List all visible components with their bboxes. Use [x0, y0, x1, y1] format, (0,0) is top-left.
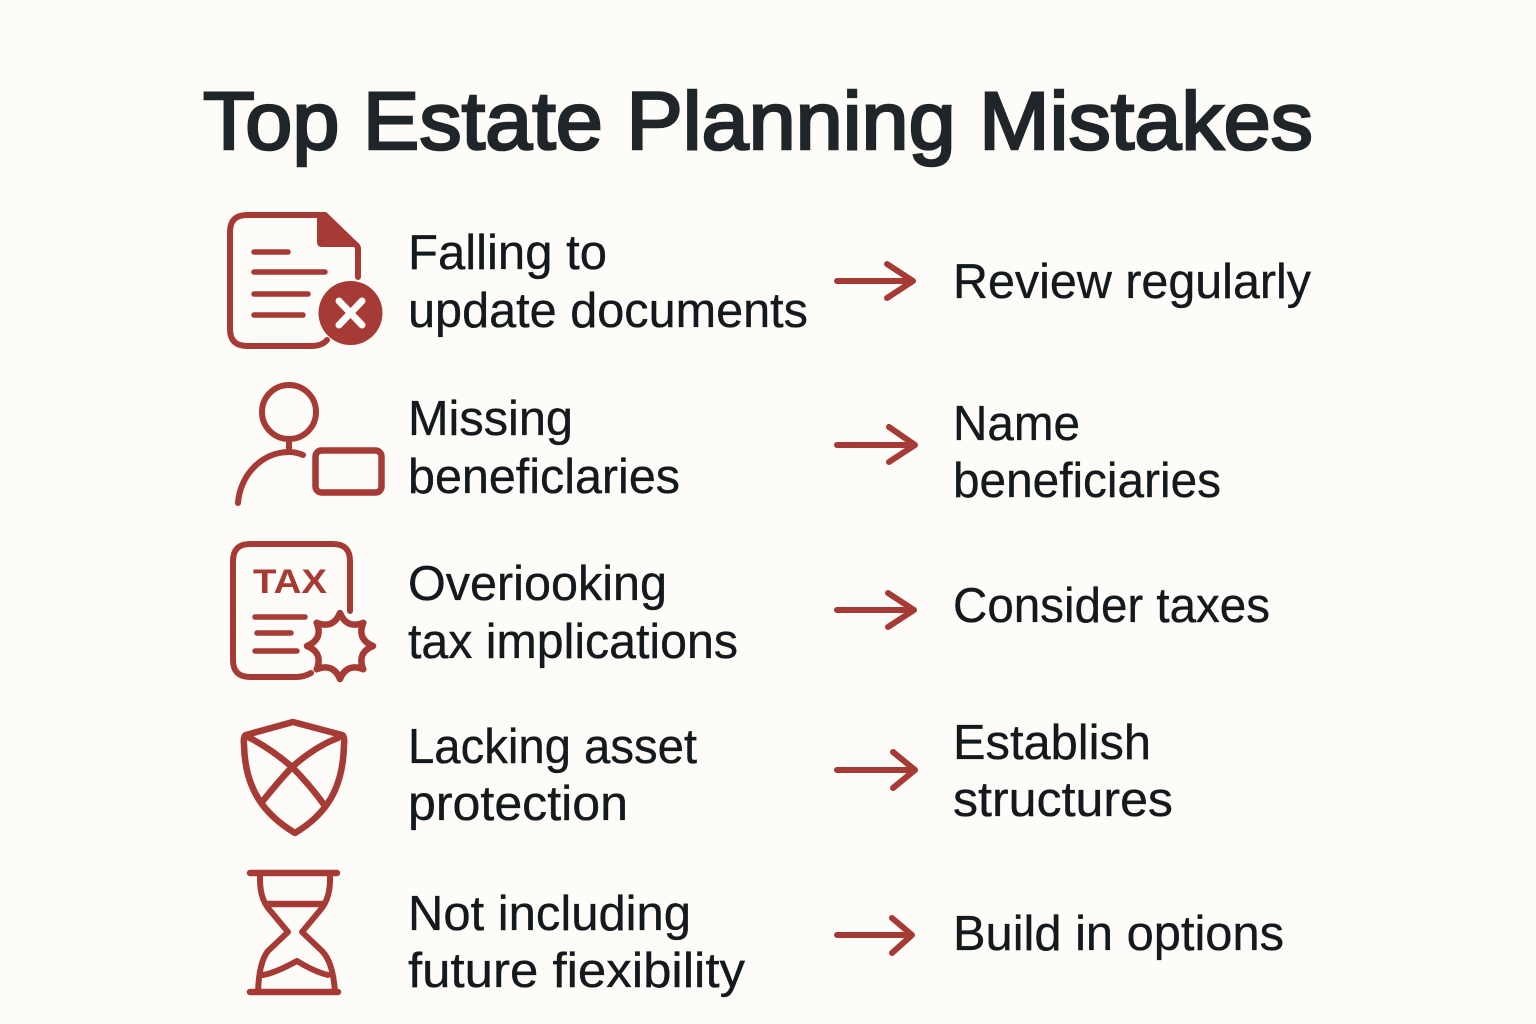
fix text: Name: [953, 397, 1080, 451]
arrow: [837, 264, 913, 298]
fix text: Establish: [953, 716, 1151, 770]
icon: tax document with gear: [233, 544, 373, 679]
mistake text: protection: [408, 777, 628, 831]
icon: tax document with gear: TAX: [253, 563, 327, 601]
icon: person with blank card: [238, 385, 382, 503]
icon: shield with cross: [244, 722, 344, 833]
mistake text: [408, 557, 738, 669]
mistake text: update documents: [408, 284, 808, 338]
fix text: beneficiaries: [953, 454, 1221, 508]
mistake text: Falling to: [408, 226, 607, 280]
mistake text: beneficlaries: [408, 450, 680, 504]
mistake text: [408, 720, 697, 831]
fix text: Build in options: [953, 907, 1284, 961]
arrow: [837, 427, 915, 462]
mistake text: [408, 887, 746, 998]
fix text: [953, 397, 1221, 508]
arrow: [837, 918, 912, 953]
fix text: structures: [953, 773, 1173, 827]
arrow: [837, 593, 914, 627]
row 2: missing beneficiaries: [238, 385, 1221, 508]
row 4: lacking asset protection: [244, 716, 1173, 833]
mistake text: Not including: [408, 887, 691, 941]
mistake text: Overiooking: [408, 557, 667, 611]
fix text: [953, 716, 1173, 827]
row 3: overlooking tax implications: [233, 544, 1270, 679]
row 5: not including future flexibility: [250, 873, 1284, 998]
mistake text: [408, 226, 808, 338]
mistake text: [408, 392, 680, 504]
fix text: Review regularly: [953, 255, 1311, 309]
fix text: Consider taxes: [953, 579, 1270, 633]
icon: hourglass: [250, 873, 338, 992]
icon: document with x badge: [230, 214, 382, 346]
row 1: failing to update documents: [230, 214, 1311, 346]
mistake text: Missing: [408, 392, 573, 446]
mistake text: tax implications: [408, 615, 738, 669]
arrow: [837, 752, 915, 788]
mistake text: Lacking asset: [408, 720, 697, 774]
mistake text: future fiexibility: [408, 944, 746, 998]
title: Top Estate Planning Mistakes: [203, 76, 1313, 167]
